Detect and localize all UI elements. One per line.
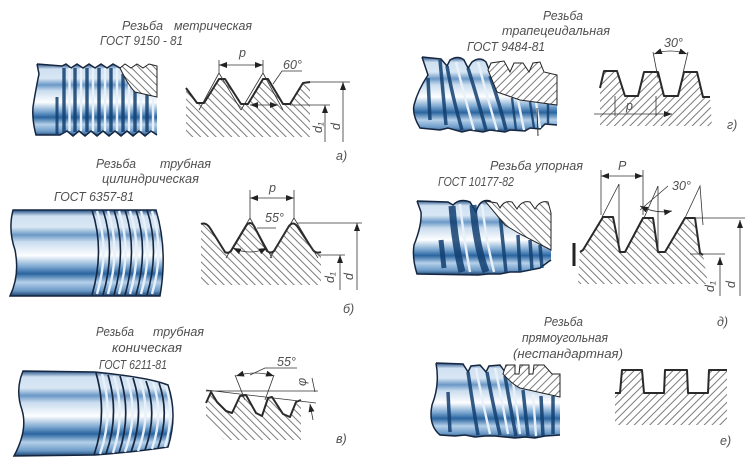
heading: cylindrical pipe thread: цилиндрическая — [102, 172, 199, 186]
cut section — [120, 64, 157, 97]
thread profile: trapezoidal — [594, 36, 712, 126]
heading: tapered pipe thread: трубная — [153, 325, 204, 339]
dimension: d and d1: d₁ — [703, 281, 717, 292]
dimension: d and d1: d — [724, 280, 738, 288]
thread profile: tapered — [206, 355, 318, 440]
pipe illustration: tapered — [14, 371, 173, 456]
dimension: d and d1 — [323, 223, 357, 290]
dimension: d and d1: d — [329, 122, 343, 130]
panel: cylindrical pipe thread — [10, 157, 362, 316]
heading: tapered pipe thread: ГОСТ 6211-81 — [99, 358, 167, 372]
label b: б) — [343, 302, 354, 316]
heading: metric thread: ГОСТ 9150 - 81 — [100, 34, 183, 48]
dimension: 55 degrees: 55° — [277, 355, 296, 369]
heading: cylindrical pipe thread: Резьба — [96, 157, 136, 171]
dimension: d and d1: d₁ — [323, 272, 337, 283]
heading: tapered pipe thread: коническая — [112, 341, 182, 355]
dimension: pitch P — [601, 159, 643, 176]
heading: trapezoidal thread: Резьба — [543, 9, 583, 23]
cut section — [485, 201, 551, 250]
dimension: d and d1: d — [342, 272, 356, 280]
dimension: 60 degrees: 60° — [283, 58, 302, 72]
pipe illustration: cylindrical — [10, 210, 163, 296]
heading: cylindrical pipe thread — [54, 157, 211, 204]
dimension: 30 degrees: 30° — [664, 36, 683, 50]
heading: metric thread — [100, 19, 252, 48]
heading: cylindrical pipe thread: ГОСТ 6357-81 — [54, 190, 134, 204]
label d: д) — [717, 315, 728, 329]
heading: trapezoidal thread — [467, 9, 610, 54]
label e: е) — [720, 434, 731, 448]
bolt illustration: square — [431, 363, 560, 438]
label g: г) — [727, 118, 737, 132]
dimension: pitch p: р — [268, 181, 276, 195]
panel: trapezoidal thread — [414, 9, 737, 136]
dimension: d and d1 — [703, 220, 740, 296]
dimension: 55 degrees — [233, 211, 284, 252]
thread profile: metric — [186, 46, 350, 142]
dimension: pitch P: Р — [618, 159, 627, 173]
heading: buttress thread: ГОСТ 10177-82 — [438, 175, 514, 189]
bolt illustration: trapezoidal — [414, 57, 557, 136]
panel: square thread — [431, 315, 731, 448]
heading: square thread: (нестандартная) — [513, 347, 623, 361]
dimension: pitch p: р — [625, 99, 633, 113]
cut section — [503, 365, 560, 397]
marker bar — [572, 243, 576, 266]
label v: в) — [336, 432, 347, 446]
heading: cylindrical pipe thread: трубная — [160, 157, 211, 171]
heading: trapezoidal thread: трапецеидальная — [502, 24, 610, 38]
cut section — [488, 61, 557, 105]
heading: square thread: Резьба — [544, 315, 583, 329]
dimension: pitch p — [219, 46, 263, 65]
dimension: pitch p — [250, 181, 294, 198]
dimension: taper angle phi: φ — [295, 378, 309, 386]
bolt illustration: buttress — [413, 200, 551, 275]
dimension: pitch p: р — [238, 46, 246, 60]
heading: metric thread: метрическая — [174, 19, 252, 33]
bolt illustration: metric — [33, 64, 157, 136]
dimension: d and d1: d₁ — [311, 122, 325, 133]
heading: tapered pipe thread — [96, 325, 204, 372]
dimension: 30 degrees — [640, 179, 691, 212]
dimension: d and d1 — [250, 82, 343, 142]
heading: buttress thread: Резьба упорная — [490, 159, 583, 173]
heading: square thread — [513, 315, 623, 361]
thread profile: cylindrical — [201, 181, 362, 290]
heading: buttress thread — [438, 159, 583, 189]
thread profile: square — [615, 370, 727, 425]
thread profile: buttress — [572, 159, 745, 296]
label a: а) — [336, 149, 347, 163]
heading: tapered pipe thread: Резьба — [96, 325, 134, 339]
panel: buttress thread — [413, 159, 745, 329]
heading: metric thread: Резьба — [122, 19, 163, 33]
heading: square thread: прямоугольная — [522, 331, 608, 345]
dimension: 30 degrees: 30° — [672, 179, 691, 193]
panel: metric thread — [33, 19, 350, 163]
heading: trapezoidal thread: ГОСТ 9484-81 — [467, 40, 545, 54]
panel: tapered pipe thread — [14, 325, 347, 456]
dimension: 55 degrees: 55° — [265, 211, 284, 225]
